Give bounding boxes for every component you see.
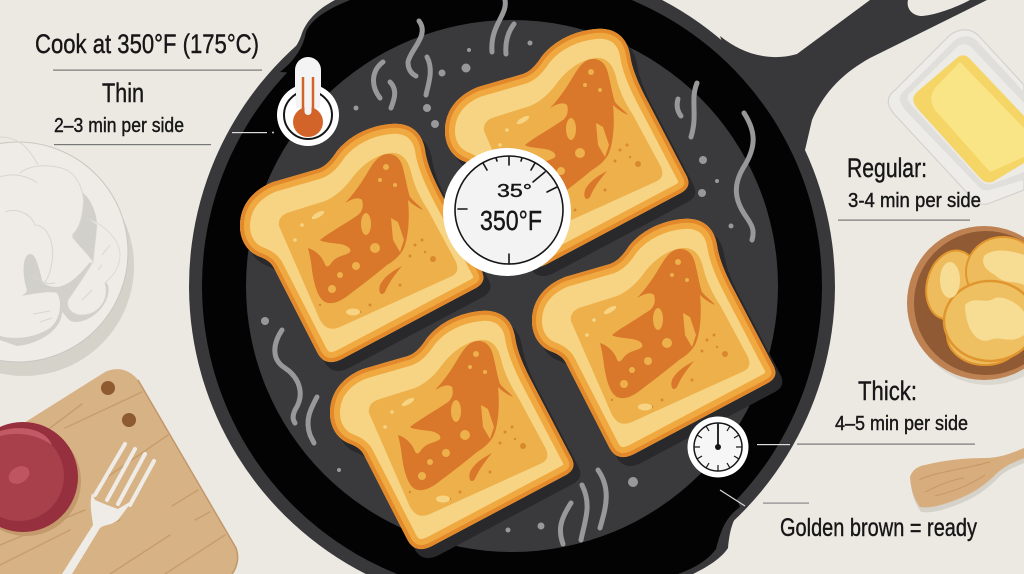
label: regular slice time: 3-4 min per side: [848, 190, 981, 212]
plate with whipped butter: [0, 137, 134, 376]
wooden spatula: [910, 448, 1024, 512]
label: golden brown: Golden brown = ready: [780, 514, 977, 542]
label: thin slice time: 2–3 min per side: [54, 115, 184, 137]
butter dish: [888, 30, 1024, 204]
cutting board: [0, 369, 238, 574]
label: regular slice time: Regular:: [847, 153, 927, 183]
toast: top left: [240, 124, 490, 371]
jam jar lid: [0, 422, 81, 536]
toast: right: [532, 219, 782, 466]
heading: cook temperature: Cook at 350°F (175°C): [35, 29, 259, 59]
label: thin slice time: Thin: [102, 78, 144, 108]
icon: temperature dial: [443, 148, 571, 276]
icon: clock timer: [688, 416, 748, 478]
label: thick slice time: Thick:: [858, 376, 917, 406]
bowl of pancakes: [907, 226, 1024, 385]
icon: thermometer: [277, 57, 339, 146]
pan handle: [720, 0, 987, 150]
label: thick slice time: [757, 376, 975, 445]
toast: bottom: [330, 311, 580, 558]
label: thin slice time: [54, 78, 274, 145]
label: golden brown: [720, 490, 977, 542]
oil droplets: [261, 40, 734, 532]
steam wisps: [275, 0, 753, 544]
icon: temperature dial: 35°: [497, 181, 532, 201]
label: thick slice time: 4–5 min per side: [835, 413, 968, 435]
toast: top right: [445, 29, 695, 276]
fork: [62, 444, 154, 574]
skillet body: [189, 0, 835, 574]
label: regular slice time: [838, 153, 981, 221]
icon: temperature dial: 350°F: [480, 205, 542, 236]
